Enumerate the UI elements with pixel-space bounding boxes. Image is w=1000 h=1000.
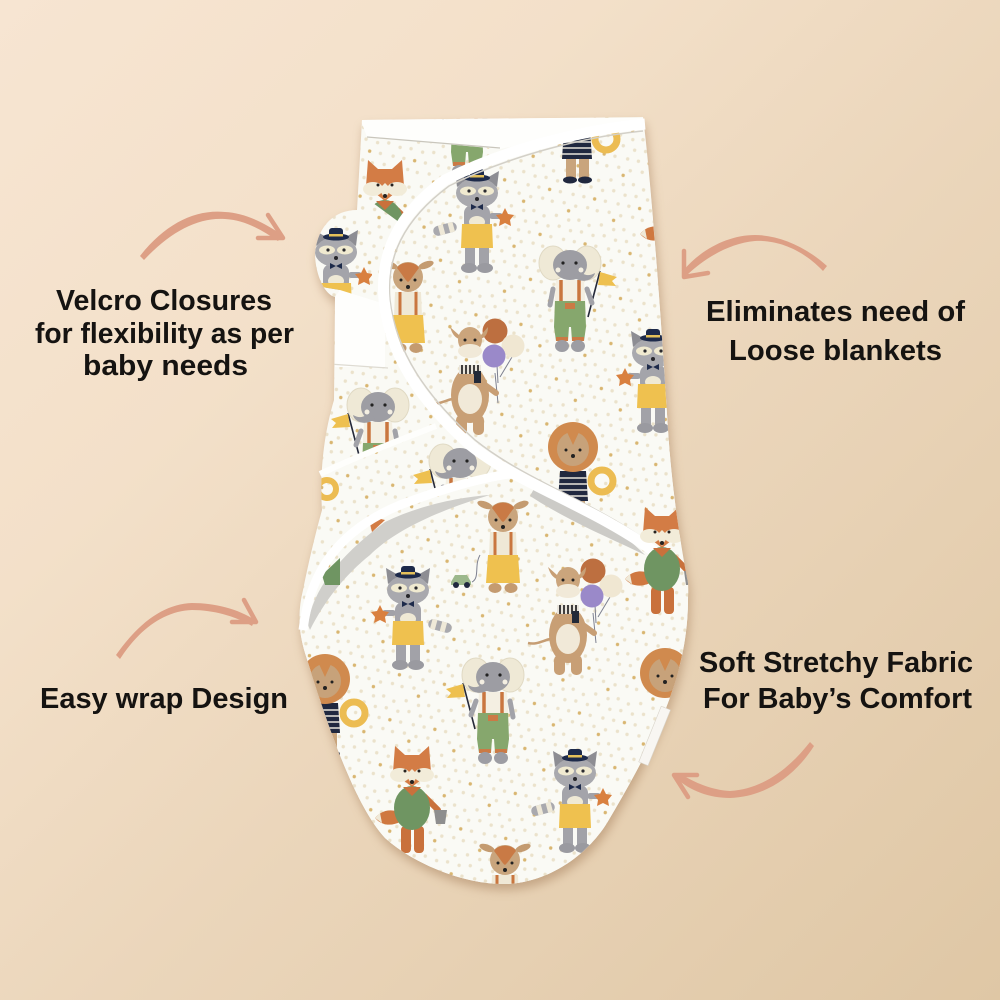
text: soft stretchy fabric: For Baby’s Comfort — [703, 683, 973, 715]
giraffe with balloons — [430, 318, 524, 435]
green fragment in pocket — [322, 558, 340, 585]
right wrap panel — [383, 125, 688, 588]
velcro lower fold line — [329, 364, 388, 368]
lion on left edge — [300, 654, 365, 758]
text: velcro closures: for flexibility as per — [35, 318, 294, 350]
arrow: soft stretchy fabric — [674, 742, 814, 798]
partial elephant and flag — [413, 444, 491, 488]
deer at flap edge — [390, 260, 434, 353]
arrow: eliminates loose blankets — [683, 235, 827, 277]
text: soft stretchy fabric — [699, 647, 973, 715]
top white wedge — [360, 118, 645, 149]
elephant with flag — [539, 246, 617, 352]
right panel animals — [390, 132, 668, 503]
garment label — [639, 706, 670, 766]
swim ring on left — [318, 480, 336, 498]
left flap edge — [320, 426, 436, 474]
pocket inner shade right — [530, 487, 645, 555]
deer at bottom — [479, 844, 531, 884]
upper left animals — [315, 118, 644, 501]
elephant with flag in pocket — [446, 658, 524, 764]
fox on upper left panel — [363, 160, 407, 221]
raccoon on velcro tab — [315, 228, 372, 294]
wrap binding shadow — [389, 131, 650, 543]
toy car — [451, 555, 480, 588]
text: eliminates need of loose blankets — [706, 296, 966, 367]
pocket fabric — [300, 484, 688, 884]
fox tail at right edge — [640, 226, 655, 241]
elephant trousers at top edge — [442, 118, 488, 170]
fox ear at pocket edge — [368, 516, 385, 532]
lower pocket panel — [300, 484, 688, 884]
swaddle body fabric — [299, 117, 688, 884]
raccoon with star in pocket — [371, 566, 453, 670]
raccoon at bottom right — [530, 749, 612, 853]
arrow: velcro closures — [140, 212, 283, 260]
text: velcro closures: Velcro Closures — [56, 285, 272, 317]
lion with ring — [548, 422, 616, 503]
text: eliminates need of loose blankets: Eliminates need of — [706, 296, 966, 328]
arrow: easy wrap design — [116, 600, 256, 659]
deer with toy car — [476, 499, 530, 593]
fox with bucket — [375, 746, 447, 853]
lion legs at top — [562, 132, 620, 184]
raccoon with star — [432, 169, 514, 273]
swaddle shadow — [301, 123, 690, 890]
raccoon at right edge — [616, 329, 668, 433]
top binding fold line — [367, 137, 500, 148]
text: soft stretchy fabric: Soft Stretchy Fabric — [699, 647, 973, 679]
swaddle wrap — [298, 117, 688, 884]
giraffe with balloons in pocket — [528, 558, 622, 675]
elephant on left flap — [331, 388, 410, 454]
text: velcro closures: baby needs — [83, 350, 248, 382]
text: eliminates need of loose blankets: Loose blankets — [729, 335, 942, 367]
fox at right of pocket — [625, 507, 688, 614]
wrap binding curve — [383, 124, 655, 552]
velcro strip — [335, 290, 385, 367]
text: velcro closures — [35, 285, 294, 382]
lion on right edge — [640, 648, 682, 698]
pocket inner shade left — [308, 495, 490, 630]
text: easy wrap design: Easy wrap Design — [40, 683, 288, 715]
pocket binding curve — [303, 474, 510, 630]
